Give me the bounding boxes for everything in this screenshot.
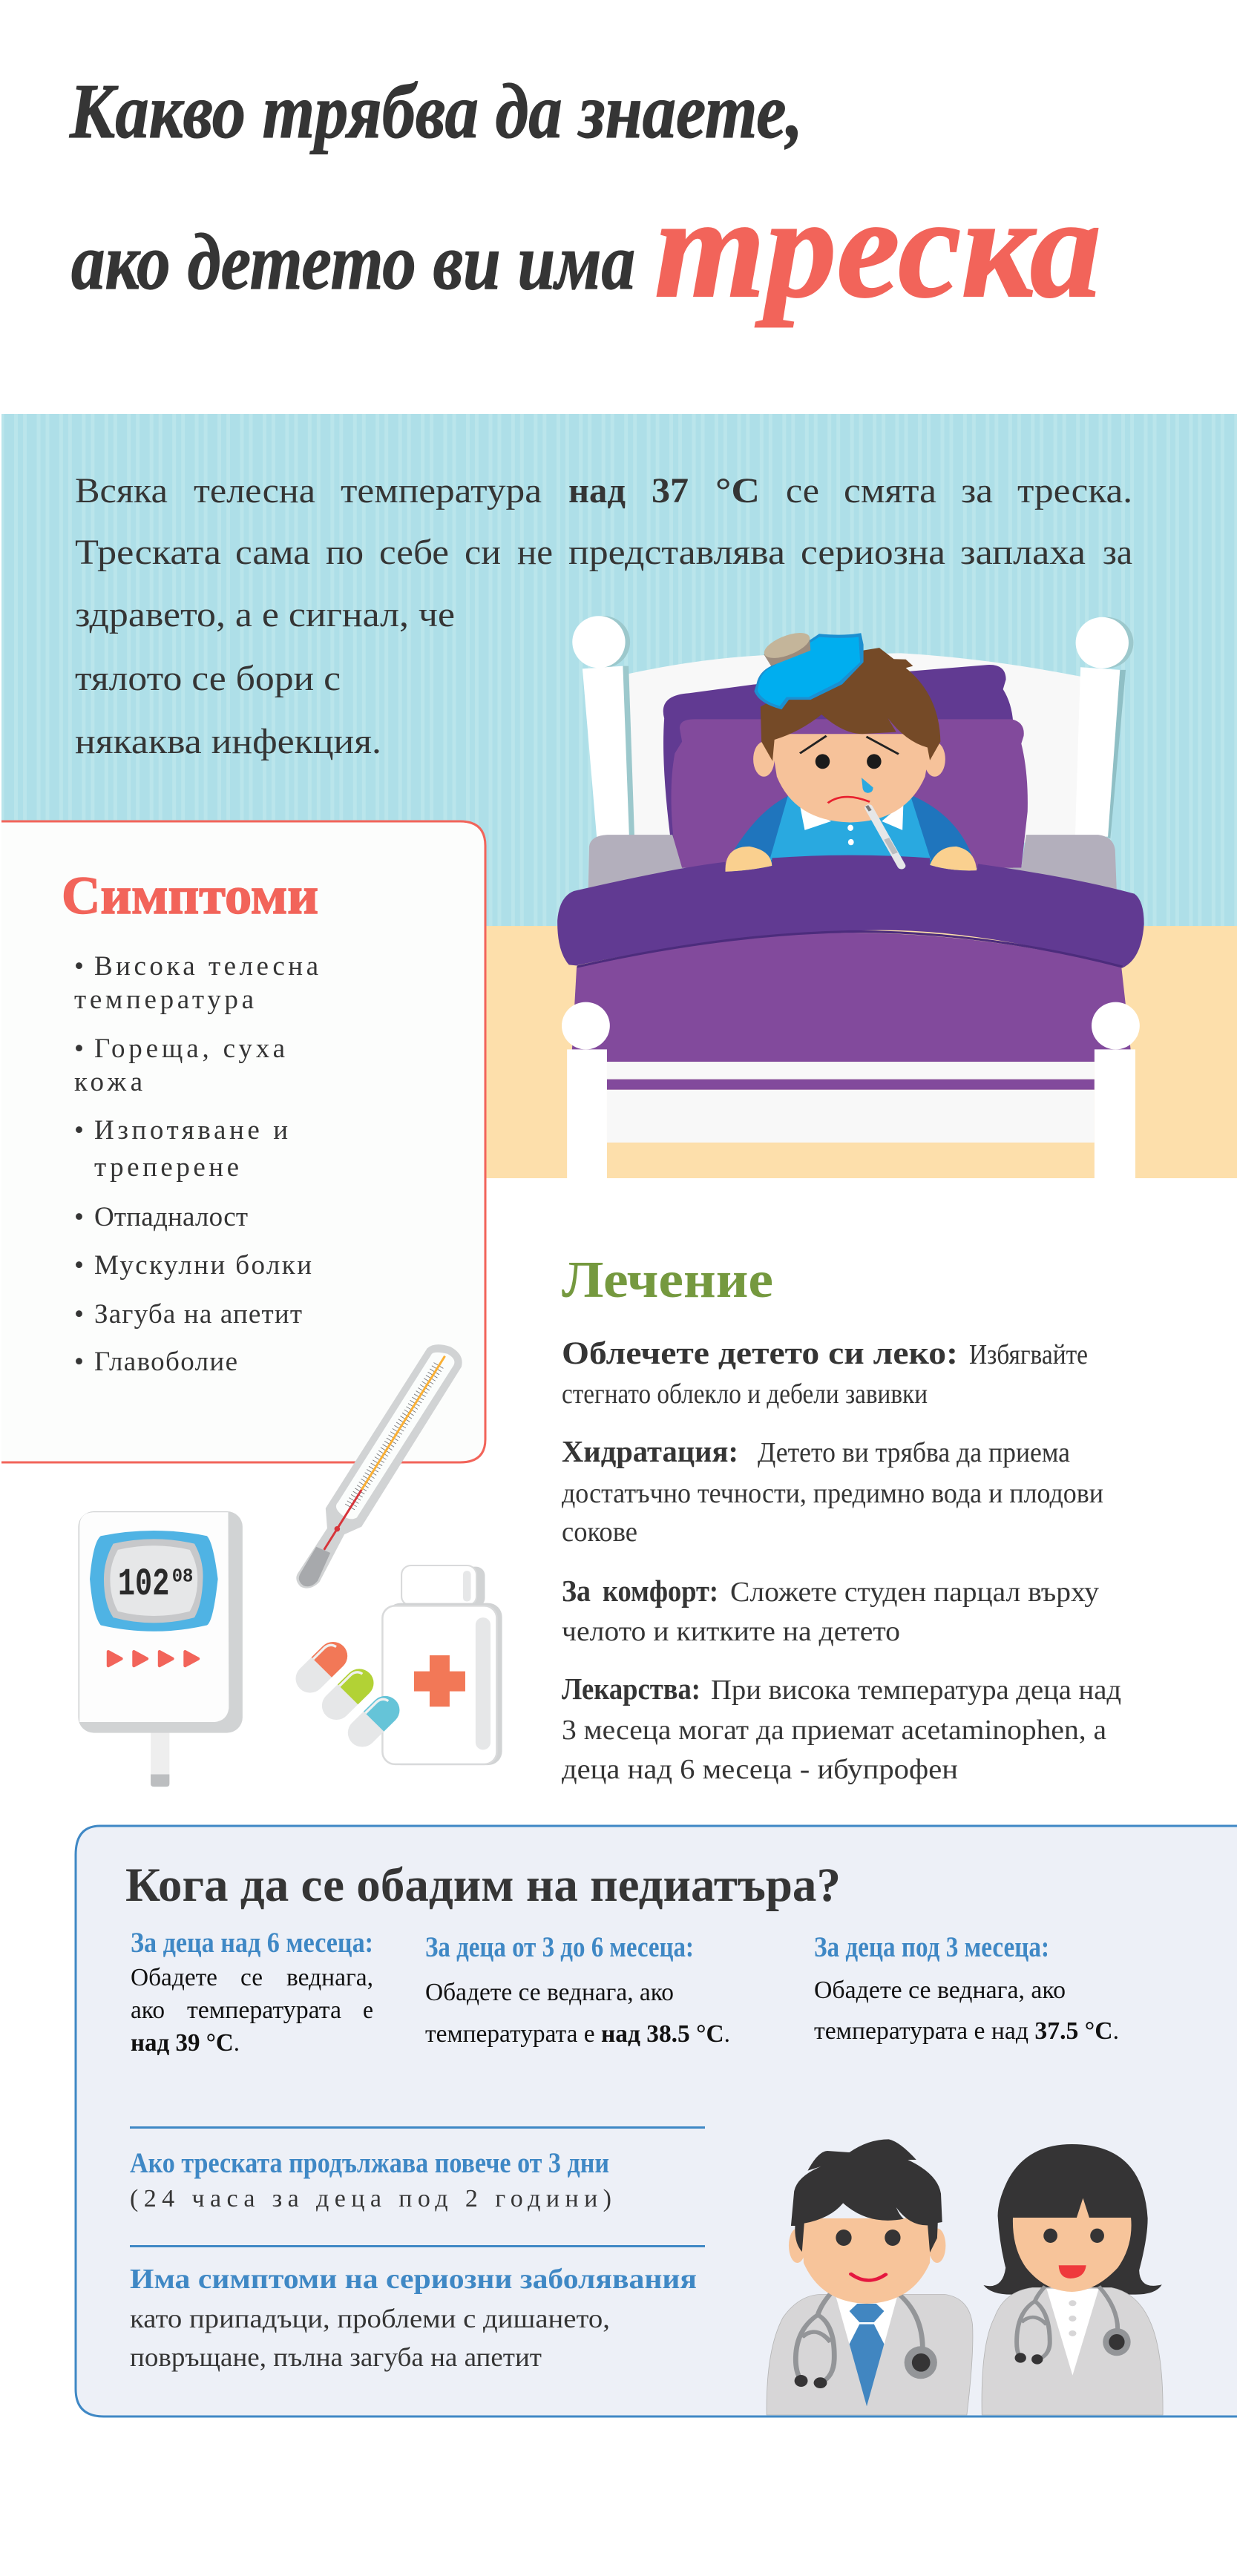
column: over 6 months: За деца над 6 месеца: <box>131 1927 373 1959</box>
column: 3 to 6 months <box>425 1931 730 2048</box>
footboard <box>562 1002 1140 1178</box>
column: 3 to 6 months: За деца от 3 до 6 месеца: <box>425 1931 694 1963</box>
treatment: hydration <box>562 1434 1103 1548</box>
boy <box>730 648 972 873</box>
column: under 3 months: За деца под 3 месеца: <box>814 1931 1049 1963</box>
treatment: clothing: Облечете детето си леко: <box>562 1336 958 1371</box>
icon: glucose meter: 102 <box>118 1563 169 1606</box>
treatment: hydration: сокове <box>562 1517 637 1548</box>
intro text: някаква инфекция. <box>75 722 381 761</box>
intro text: си <box>465 533 501 572</box>
symptoms list: • <box>74 1202 84 1232</box>
intro text: се <box>786 471 819 510</box>
treatment: hydration: Хидратация: <box>562 1434 738 1468</box>
intro text <box>75 471 1132 761</box>
panel: room background <box>1 414 1237 1178</box>
column: over 6 months <box>131 1927 373 2057</box>
intro text: сама <box>235 533 310 572</box>
symptoms list: Загуба на апетит <box>94 1299 302 1330</box>
column: over 6 months: е <box>363 1997 373 2024</box>
column: under 3 months: температурата е над 37.5 °C. <box>814 2017 1119 2045</box>
intro text: Треската <box>75 533 221 572</box>
intro text: тялото се бори с <box>75 659 341 698</box>
female doctor <box>982 2144 1163 2415</box>
treatment: medicine: деца над 6 месеца - ибупрофен <box>562 1754 958 1785</box>
symptoms list: Главоболие <box>94 1347 237 1377</box>
icon: glucose meter: 08 <box>172 1565 193 1588</box>
illustration: sick child in bed <box>557 616 1144 1178</box>
treatment: medicine: 3 месеца могат да приемат acetaminophen, а <box>562 1715 1106 1746</box>
title: ако детето ви има <box>71 218 635 306</box>
panel: when to call the pediatrician <box>76 1826 1237 2416</box>
serious symptoms note: като припадъци, проблеми с дишането, <box>130 2304 610 2333</box>
treatment: medicine <box>562 1672 1121 1785</box>
treatment heading: Лечение <box>562 1252 773 1309</box>
pediatrician heading: Кога да се обадим на педиатъра? <box>125 1859 841 1912</box>
illustration: doctors <box>767 2139 1163 2415</box>
column: over 6 months: ако <box>131 1997 165 2024</box>
treatment: comfort: Сложете студен парцал върху <box>730 1577 1099 1608</box>
intro text: по <box>326 533 364 572</box>
column: over 6 months: веднага, <box>286 1964 373 1991</box>
fever duration note: (24 часа за деца под 2 години) <box>130 2185 611 2212</box>
intro text: над <box>568 471 626 510</box>
treatment: clothing <box>562 1336 1088 1410</box>
column: 3 to 6 months: Обадете се веднага, ако <box>425 1979 674 2006</box>
serious symptoms note: Има симптоми на сериозни заболявания <box>130 2264 697 2295</box>
intro text: заплаха <box>960 533 1086 572</box>
symptoms list <box>74 951 318 1377</box>
intro text: Всяка <box>75 471 168 510</box>
blanket <box>557 847 1144 1062</box>
icon: thermometer <box>296 1344 462 1588</box>
mattress <box>588 835 1117 889</box>
icon: medicine bottle <box>382 1565 502 1765</box>
symptoms list: Висока телесна <box>94 951 318 982</box>
male doctor <box>767 2139 973 2415</box>
intro text: сериозна <box>801 533 945 572</box>
treatment: medicine: При висока температура деца над <box>711 1675 1121 1706</box>
symptoms heading: Симптоми <box>62 866 318 925</box>
icons: thermometer, glucose meter, medicine <box>78 1344 502 1787</box>
intro text: смята <box>844 471 936 510</box>
symptoms list: • <box>74 1347 84 1377</box>
symptoms list: • <box>74 951 84 982</box>
treatment: clothing: стегнато облекло и дебели завивки <box>562 1379 928 1410</box>
column: over 6 months: Обадете <box>131 1964 217 1991</box>
treatment: medicine: Лекарства: <box>562 1672 700 1706</box>
column: over 6 months: се <box>240 1964 263 1991</box>
column: under 3 months: Обадете се веднага, ако <box>814 1977 1066 2004</box>
intro text: 37 <box>652 471 689 510</box>
fever duration note <box>130 2147 611 2212</box>
column: 3 to 6 months: температурата е над 38.5 °C. <box>425 2020 730 2048</box>
treatment: hydration: достатъчно течности, предимно вода и плодови <box>562 1478 1103 1509</box>
intro text: здравето, а е сигнал, че <box>75 595 455 634</box>
headboard <box>572 616 1133 843</box>
intro text: треска. <box>1017 471 1132 510</box>
serious symptoms note: повръщане, пълна загуба на апетит <box>130 2342 542 2372</box>
symptoms list: Отпадналост <box>94 1202 248 1232</box>
intro text: температура <box>341 471 542 510</box>
symptoms list: кожа <box>74 1067 142 1097</box>
symptoms list: температура <box>74 985 254 1015</box>
treatment: hydration: Детето ви трябва да приема <box>758 1437 1070 1468</box>
symptoms list: Мускулни болки <box>94 1250 312 1281</box>
title: треска <box>654 168 1101 328</box>
intro text: за <box>1103 533 1132 572</box>
intro text: °C <box>715 471 760 510</box>
symptoms list: Изпотяване и <box>94 1115 288 1146</box>
intro text: телесна <box>194 471 315 510</box>
symptoms list: Гореща, суха <box>94 1034 285 1064</box>
symptoms list: • <box>74 1115 84 1146</box>
treatment: comfort: За <box>562 1574 591 1608</box>
treatment: comfort <box>562 1574 1099 1647</box>
intro text: себе <box>379 533 449 572</box>
column: under 3 months <box>814 1931 1119 2045</box>
column: over 6 months: температурата <box>187 1997 341 2024</box>
pillows <box>663 665 1028 870</box>
serious symptoms note <box>130 2264 697 2372</box>
intro text: представлява <box>568 533 785 572</box>
title <box>69 68 1101 328</box>
symptoms list: треперене <box>94 1152 239 1183</box>
title: Какво трябва да знаете, <box>69 68 803 154</box>
column: over 6 months: над 39 °C. <box>131 2029 240 2057</box>
icon: glucose meter <box>78 1511 243 1787</box>
ice bag <box>754 628 864 709</box>
treatment: clothing: Избягвайте <box>969 1339 1088 1370</box>
symptoms list: • <box>74 1250 84 1281</box>
treatment: comfort: челото и китките на детето <box>562 1616 900 1647</box>
intro text: за <box>961 471 993 510</box>
oral thermometer <box>867 806 902 866</box>
treatment: comfort: комфорт: <box>603 1574 718 1608</box>
panel: symptoms <box>1 821 485 1462</box>
panel: treatment <box>562 1252 1121 1785</box>
symptoms list: • <box>74 1299 84 1330</box>
intro text: не <box>517 533 553 572</box>
icon: pills <box>289 1636 405 1752</box>
fever duration note: Ако треската продължава повече от 3 дни <box>130 2147 609 2179</box>
symptoms list: • <box>74 1034 84 1064</box>
